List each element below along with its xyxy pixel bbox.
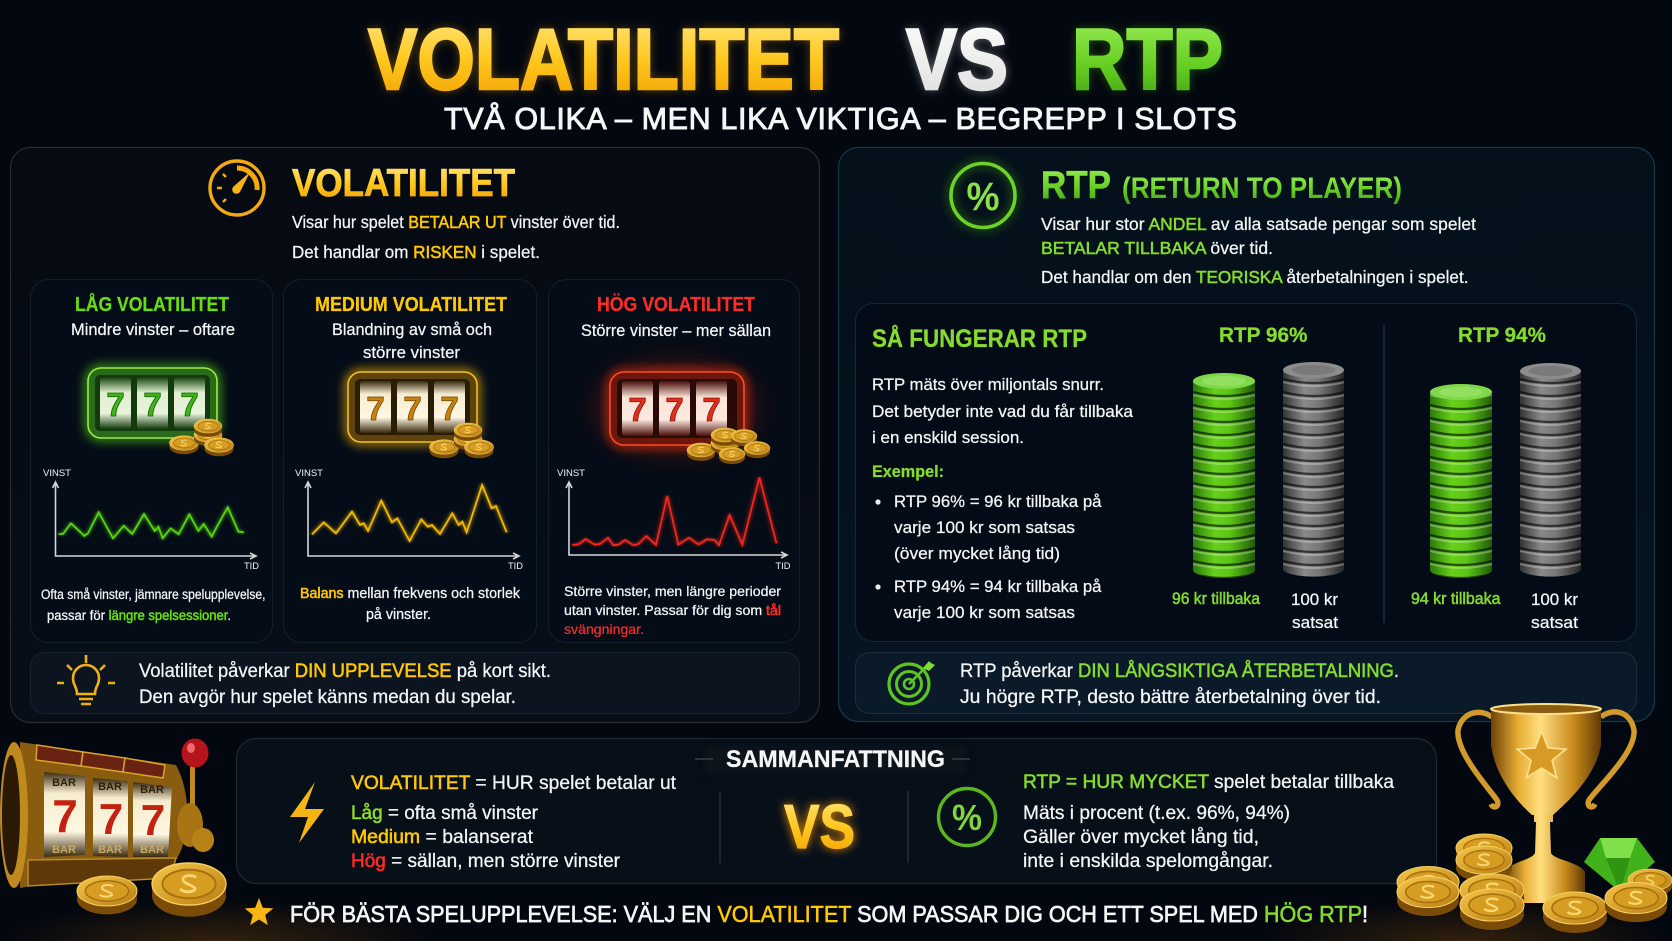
heading: rtp (1041, 164, 1402, 207)
icon: target (889, 661, 935, 704)
text: description: utan vinster. Passar för dig som tål (564, 602, 781, 618)
text: intro line 2: Det handlar om RISKEN i spelet. (292, 242, 540, 262)
icon: green slot (88, 368, 217, 438)
text: rtp summary: Gäller över mycket lång tid, (1023, 827, 1259, 848)
subheading: Blandning av små och (332, 320, 492, 339)
illustration: trophy (1397, 704, 1672, 933)
subheading: Större vinster – mer sällan (581, 321, 771, 340)
title: RTP (1072, 12, 1223, 108)
icon: big slot machine: 7 (99, 795, 123, 844)
icon: light bulb (57, 655, 115, 704)
icon: gold slot: 7 (366, 390, 385, 427)
icon: green slot: 7 (106, 386, 125, 423)
text: rtp summary: Mäts i procent (t.ex. 96%, 94%) (1023, 803, 1290, 824)
title: RTP (1072, 12, 1223, 108)
text: volatilitet summary: Hög = sällan, men större vinster (351, 851, 621, 872)
text: explanation: i en enskild session. (872, 428, 1024, 447)
text: Den avgör hur spelet känns medan du spelar. (139, 687, 516, 708)
line chart: medium volatility (295, 468, 524, 571)
card: låg volatilitet (30, 280, 272, 642)
card: medium volatilitet (284, 280, 536, 642)
text: description: på vinster. (366, 607, 431, 623)
text (960, 661, 1399, 708)
text: rtp summary: RTP = HUR MYCKET spelet betalar tillbaka (1023, 772, 1394, 793)
list: examples (875, 492, 1102, 622)
text: intro: Visar hur stor ANDEL av alla satsade pengar som spelet (1041, 214, 1476, 234)
text: intro: BETALAR TILLBAKA över tid. (1041, 238, 1273, 258)
icon: coins (430, 423, 494, 458)
list: examples: varje 100 kr som satsas (894, 603, 1075, 622)
icon: percent: % (966, 175, 1000, 219)
labels: stacks (1172, 590, 1578, 632)
icon: coins (687, 428, 770, 464)
line chart: low volatility: TID (244, 561, 260, 571)
text: description: svängningar. (564, 621, 644, 637)
text: volatilitet summary: VOLATILITET = HUR spelet betalar ut (351, 773, 677, 794)
text: explanation (872, 375, 1134, 447)
icon: star (245, 898, 273, 925)
panel: så fungerar rtp (856, 304, 1636, 642)
list: examples: (över mycket lång tid) (894, 544, 1060, 563)
title: VOLATILITET (368, 12, 839, 108)
icon: gauge (210, 161, 264, 215)
list: examples: varje 100 kr som satsas (894, 518, 1075, 537)
subtitle: TVÅ OLIKA – MEN LIKA VIKTIGA – BEGREPP I SLOTS (444, 101, 1237, 136)
heading: rtp 94: RTP 94% (1458, 324, 1546, 347)
icon: gold slot: 7 (440, 390, 459, 427)
text: volatilitet summary (351, 773, 677, 872)
icon: red slot: 7 (702, 391, 721, 428)
icon: percent: % (952, 797, 982, 838)
card: hög volatilitet (548, 280, 800, 642)
heading: SÅ FUNGERAR RTP (872, 324, 1087, 353)
line chart: high volatility: TID (776, 561, 791, 571)
icon: big slot machine: BAR (140, 784, 164, 796)
labels: stacks: satsat (1292, 613, 1338, 632)
text: description: passar för längre spelsessioner. (47, 608, 231, 623)
line chart: low volatility (43, 468, 260, 571)
text: volatilitet summary: Låg = ofta små vinster (351, 803, 539, 824)
heading: HÖG VOLATILITET (597, 293, 755, 316)
labels: stacks: 100 kr (1291, 590, 1338, 609)
list: examples: RTP 94% = 94 kr tillbaka på (894, 577, 1102, 596)
icon: lightning (290, 782, 324, 843)
text: intro (1041, 214, 1476, 287)
icon: big slot machine: BAR (140, 844, 164, 856)
heading: volatilitet: VOLATILITET (292, 162, 515, 205)
text: volatilitet summary: Medium = balanserat (351, 827, 534, 848)
panel: rtp (838, 148, 1654, 722)
panel: volatilitet (10, 148, 820, 722)
icon: big slot machine: BAR (98, 844, 122, 856)
heading: rtp: RTP (1041, 164, 1111, 207)
text: intro line 1: Visar hur spelet BETALAR UT vinster över tid. (292, 212, 620, 232)
title (368, 12, 1223, 108)
info bar: volatilitet (30, 652, 800, 714)
labels: stacks: 94 kr tillbaka (1411, 590, 1501, 608)
icon: coins (170, 419, 234, 456)
heading: SAMMANFATTNING (726, 746, 945, 773)
icon: big slot machine: BAR (52, 844, 76, 856)
chart: gray stack 94 (1520, 363, 1581, 577)
text: rtp summary: inte i enskilda spelomgångar. (1023, 851, 1273, 872)
labels: stacks: 100 kr (1531, 590, 1578, 609)
line chart: low volatility: VINST (43, 468, 72, 478)
icon: percent (951, 164, 1015, 228)
icon: big slot machine: 7 (52, 790, 78, 842)
heading: MEDIUM VOLATILITET (315, 294, 507, 316)
line chart: medium volatility: TID (508, 561, 524, 571)
line chart: medium volatility: VINST (295, 468, 324, 478)
text: RTP påverkar DIN LÅNGSIKTIGA ÅTERBETALNING. (960, 661, 1399, 682)
text: description: Ofta små vinster, jämnare spelupplevelse, (41, 587, 266, 602)
icon: big slot machine: 7 (141, 796, 165, 845)
text: vs: VS (784, 793, 855, 862)
labels: stacks: 96 kr tillbaka (1172, 590, 1261, 608)
text: explanation: RTP mäts över miljontals snurr. (872, 375, 1104, 394)
title: VS (906, 12, 1008, 108)
icon: red slot: 7 (628, 391, 647, 428)
heading: rtp: (RETURN TO PLAYER) (1122, 172, 1402, 205)
text: rtp summary (1023, 772, 1394, 872)
text: bottom banner: FÖR BÄSTA SPELUPPLEVELSE: VÄLJ EN VOLATILITET SOM PASSAR DIG OCH ETT SPEL MED HÖG RTP! (290, 901, 1368, 927)
text: description (41, 587, 266, 623)
title: VS (906, 12, 1008, 108)
list: examples: RTP 96% = 96 kr tillbaka på (894, 492, 1102, 511)
icon: gold slot (348, 372, 477, 442)
heading: LÅG VOLATILITET (75, 292, 229, 316)
text (139, 661, 551, 708)
labels: stacks: satsat (1531, 613, 1578, 632)
info bar: rtp (856, 652, 1636, 714)
panel: sammanfattning (236, 738, 1436, 884)
chart: gray stack 96 (1283, 362, 1344, 577)
icon: gold slot: 7 (403, 390, 422, 427)
heading: rtp 96: RTP 96% (1219, 324, 1308, 347)
subheading (332, 320, 492, 362)
icon: big slot machine: BAR (98, 781, 122, 793)
line chart: high volatility: VINST (557, 468, 586, 478)
line chart: high volatility (557, 468, 791, 571)
text: description: Balans mellan frekvens och storlek (300, 586, 521, 602)
icon: big slot machine: BAR (52, 777, 76, 789)
text: description (300, 586, 521, 623)
text: Volatilitet påverkar DIN UPPLEVELSE på kort sikt. (139, 661, 551, 682)
icon: percent (938, 788, 996, 846)
chart: green stack 94 (1430, 384, 1492, 578)
chart: green stack 96 (1193, 373, 1255, 578)
icon: red slot: 7 (665, 391, 684, 428)
text: vs: VS (784, 793, 855, 862)
subheading: Mindre vinster – oftare (71, 320, 235, 339)
text: explanation: Det betyder inte vad du får tillbaka (872, 402, 1134, 421)
subheading: större vinster (363, 343, 460, 362)
icon: red slot (597, 363, 757, 453)
text: Ju högre RTP, desto bättre återbetalning över tid. (960, 687, 1381, 708)
text: description: Större vinster, men längre perioder (564, 583, 781, 599)
text: intro: Det handlar om den TEORISKA återbetalningen i spelet. (1041, 267, 1468, 287)
title: VOLATILITET (368, 12, 839, 108)
icon: green slot: 7 (143, 386, 162, 423)
icon: big slot machine (0, 738, 226, 917)
icon: green slot: 7 (180, 386, 199, 423)
text: exempel: Exempel: (872, 462, 944, 481)
text: description (564, 583, 781, 637)
